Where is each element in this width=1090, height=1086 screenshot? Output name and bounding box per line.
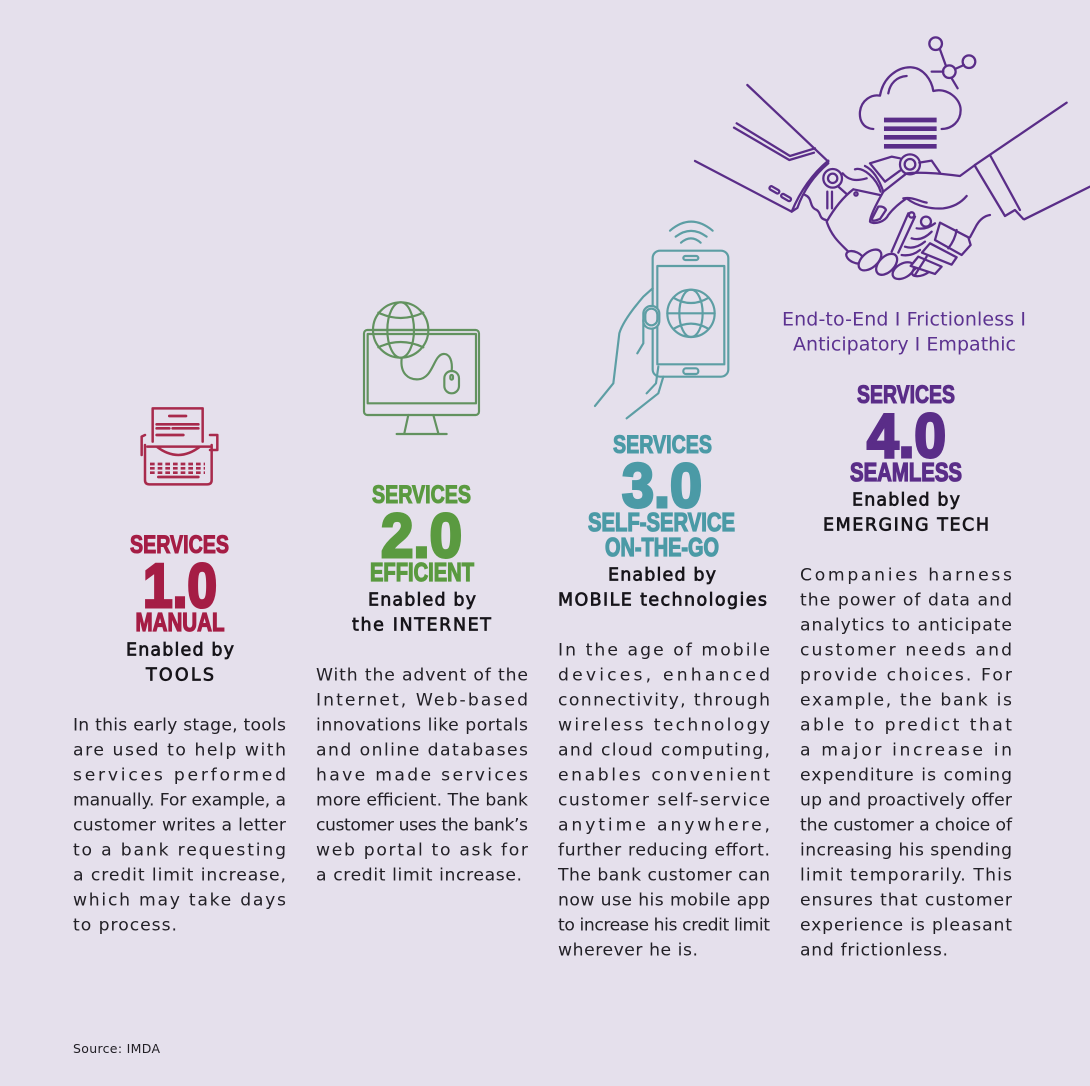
enabled by: emerging tech: Enabled by xyxy=(852,490,960,510)
icon: monitor xyxy=(364,330,479,434)
heading: Services 4.0 Seamless: SEAMLESS xyxy=(850,457,962,487)
icon: typewriter xyxy=(142,408,217,484)
icon: robot palm xyxy=(827,189,880,252)
icon: robot arm and joints xyxy=(823,154,940,208)
text block: Services 1.0 description: services performed xyxy=(73,766,286,786)
text block: Services 4.0 description: customer needs and xyxy=(800,640,1012,660)
enabled by: emerging tech xyxy=(823,490,989,536)
tagline xyxy=(782,308,1026,356)
text block: Services 2.0 description xyxy=(316,666,529,886)
text block: Services 3.0 description: wireless technology xyxy=(558,716,770,736)
heading: Services 1.0 Manual xyxy=(130,531,229,637)
icon: left suit sleeve xyxy=(695,85,828,220)
text block: Services 3.0 description: enables convenient xyxy=(558,766,770,786)
text block: Services 4.0 description: experience is pleasant xyxy=(800,916,1012,936)
text block: Services 1.0 description: In this early stage, tools xyxy=(73,716,286,736)
icon: phone body xyxy=(653,251,728,377)
text block: Services 3.0 description: anytime anywhere, xyxy=(558,816,770,836)
text block: Services 3.0 description: to increase his credit limit xyxy=(558,916,770,936)
text block: Services 4.0 description: Companies harness xyxy=(800,566,1012,586)
enabled by: mobile technologies: Enabled by xyxy=(608,566,716,586)
enabled by: mobile technologies: MOBILE technologies xyxy=(558,590,767,610)
column: Services 1.0 xyxy=(73,531,287,936)
text block: Services 4.0 description: and frictionless. xyxy=(800,940,948,960)
text block: Services 4.0 description: limit temporarily. This xyxy=(800,866,1012,886)
icon: typewriter body xyxy=(142,435,217,484)
heading: Services 3.0 Self-service on-the-go xyxy=(588,431,735,562)
heading: Services 1.0 Manual: MANUAL xyxy=(136,607,225,637)
heading: Services 1.0 Manual: SERVICES xyxy=(130,531,229,559)
text block: Services 1.0 description: a credit limit increase, xyxy=(73,866,286,886)
icon: robot fingers xyxy=(844,212,971,283)
text block: Services 3.0 description: wherever he is. xyxy=(558,940,698,960)
heading: Services 3.0 Self-service on-the-go: SELF-SERVICE xyxy=(588,507,735,537)
icon: globe xyxy=(373,302,428,358)
icon: wifi signal xyxy=(670,222,713,243)
icon: cloud with data bars xyxy=(860,67,961,146)
text block: Services 4.0 description: the power of data and xyxy=(800,590,1012,610)
heading: Services 4.0 Seamless xyxy=(850,381,962,487)
column: Services 4.0 xyxy=(782,308,1026,960)
heading: Services 4.0 Seamless: 4.0 xyxy=(867,402,946,471)
text block: Services 3.0 description: In the age of mobile xyxy=(558,640,770,660)
text block: Services 2.0 description: and online databases xyxy=(316,740,528,760)
text block: Services 4.0 description: analytics to anticipate xyxy=(800,616,1012,636)
heading: Services 2.0 Efficient xyxy=(370,481,474,587)
text block: Services 4.0 description: example, the bank is xyxy=(800,690,1012,710)
text block: Services 4.0 description: expenditure is coming xyxy=(800,766,1012,786)
icon: right suit sleeve and cuff xyxy=(975,103,1090,219)
enabled by: tools: Enabled by xyxy=(126,640,234,660)
icon: network nodes xyxy=(929,37,975,88)
text block: Services 3.0 description: and cloud computing, xyxy=(558,740,770,760)
enabled by: tools: TOOLS xyxy=(145,666,214,686)
icon: hand xyxy=(595,288,663,418)
text block: Services 4.0 description: provide choices. For xyxy=(800,666,1013,686)
tagline: Anticipatory I Empathic xyxy=(793,334,1016,356)
text block: Services 3.0 description: The bank customer can xyxy=(557,866,770,886)
heading: Services 4.0 Seamless: SERVICES xyxy=(857,381,955,409)
heading: Services 2.0 Efficient: SERVICES xyxy=(372,481,471,509)
icon: clasped robot and human hands xyxy=(823,154,990,283)
column: Services 2.0 xyxy=(316,481,529,886)
text block: Services 4.0 description: able to predict that xyxy=(800,716,1012,736)
enabled by: emerging tech: EMERGING TECH xyxy=(823,516,989,536)
text block: Services 4.0 description: a major increase in xyxy=(800,740,1012,760)
enabled by: the internet xyxy=(352,590,491,636)
text block: Services 1.0 description: which may take days xyxy=(73,890,286,910)
text block: Services 3.0 description xyxy=(557,640,770,960)
text block: Services 3.0 description: now use his mobile app xyxy=(558,890,770,910)
text block: Services 2.0 description: Internet, Web-based xyxy=(316,690,528,710)
heading: Services 3.0 Self-service on-the-go: 3.0 xyxy=(622,452,702,521)
heading: Services 3.0 Self-service on-the-go: ON-THE-GO xyxy=(605,532,719,562)
text block: Services 3.0 description: connectivity, through xyxy=(558,690,770,710)
text block: Services 1.0 description xyxy=(73,716,287,936)
text block: Services 3.0 description: customer self-service xyxy=(558,790,770,810)
enabled by: tools xyxy=(126,640,234,686)
text block: Services 3.0 description: devices, enhanced xyxy=(558,666,770,686)
text block: Services 4.0 description: up and proactively offer xyxy=(800,790,1013,810)
text block: Services 4.0 description: ensures that customer xyxy=(800,890,1013,910)
heading: Services 3.0 Self-service on-the-go: SERVICES xyxy=(613,431,712,459)
text block: Services 1.0 description: manually. For example, a xyxy=(73,790,286,810)
heading: Services 2.0 Efficient: 2.0 xyxy=(381,502,462,571)
enabled by: the internet: the INTERNET xyxy=(352,616,491,636)
column: Services 3.0 xyxy=(557,431,770,960)
text block: Services 2.0 description: customer uses the bank’s xyxy=(316,816,528,836)
text block: Services 3.0 description: further reducing effort. xyxy=(558,840,770,860)
enabled by: mobile technologies xyxy=(558,566,767,610)
icon: human hand and thumb xyxy=(870,165,990,237)
text block: Services 1.0 description: to a bank requesting xyxy=(73,840,286,860)
text block: Services 2.0 description: innovations like portals xyxy=(316,716,528,736)
text block: Services 4.0 description xyxy=(800,566,1013,960)
icon: hand holding smartphone xyxy=(595,222,728,418)
text block: Services 4.0 description: the customer a choice of xyxy=(800,816,1013,836)
enabled by: the internet: Enabled by xyxy=(368,590,476,610)
icon: desktop monitor with globe and mouse xyxy=(364,302,479,434)
text block: Services 1.0 description: customer writes a letter xyxy=(73,816,287,836)
text block: Services 2.0 description: a credit limit increase. xyxy=(316,866,522,886)
heading: Services 1.0 Manual: 1.0 xyxy=(143,552,217,621)
text block: Services 1.0 description: are used to help with xyxy=(73,740,286,760)
text block: Services 2.0 description: have made services xyxy=(316,766,528,786)
source note: Source: IMDA xyxy=(73,1041,160,1056)
icon: mouse and cable xyxy=(401,354,459,393)
icon: globe on screen xyxy=(667,290,715,337)
text block: Services 1.0 description: to process. xyxy=(73,916,177,936)
tagline: End-to-End I Frictionless I xyxy=(782,308,1026,330)
text block: Services 4.0 description: increasing his spending xyxy=(800,840,1012,860)
text block: Services 2.0 description: With the advent of the xyxy=(316,666,528,686)
heading: Services 2.0 Efficient: EFFICIENT xyxy=(370,557,474,587)
icon: paper sheet xyxy=(153,408,203,442)
text block: Services 2.0 description: more efficient. The bank xyxy=(316,790,528,810)
icon: robot and human handshake with cloud xyxy=(695,37,1090,283)
text block: Services 2.0 description: web portal to ask for xyxy=(316,840,529,860)
